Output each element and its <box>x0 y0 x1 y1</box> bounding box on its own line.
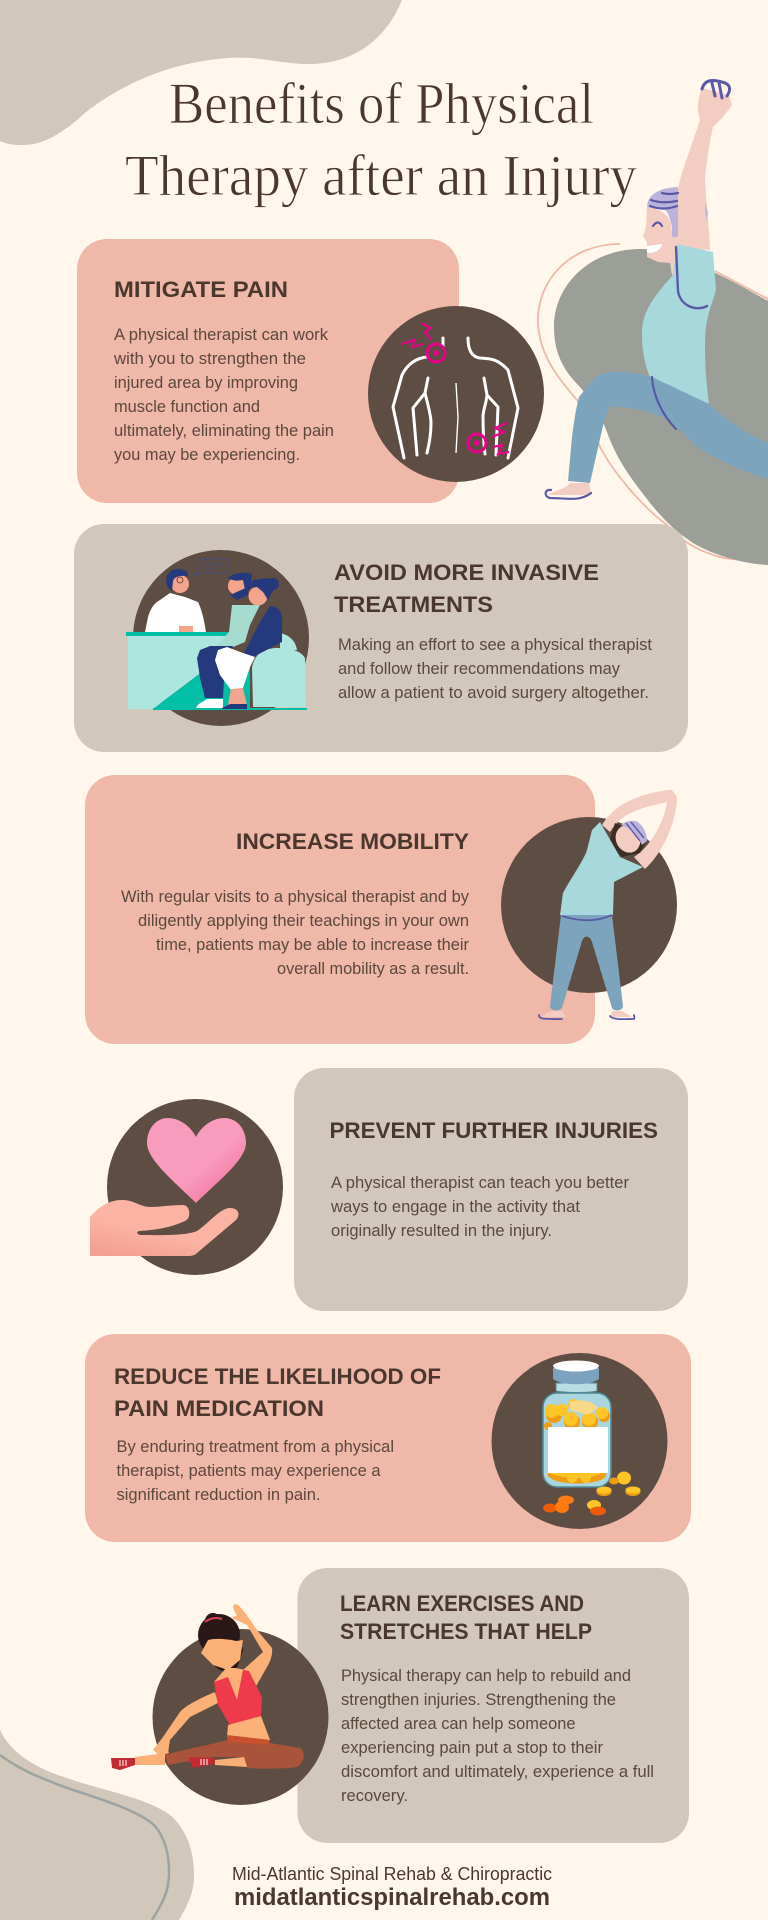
panel: avoid more invasive treatments <box>74 524 688 752</box>
icon: doctor consultation <box>126 550 309 726</box>
body text <box>116 1438 394 1504</box>
panel: mitigate pain <box>77 239 544 503</box>
hair <box>647 187 708 237</box>
body text: recovery. <box>341 1787 408 1805</box>
shirt <box>642 244 716 404</box>
body text: affected area can help someone <box>341 1715 576 1733</box>
panel: learn exercises and stretches <box>111 1568 689 1843</box>
heading: INCREASE MOBILITY <box>236 829 469 854</box>
panel: reduce the likelihood of pain medication <box>85 1334 691 1542</box>
heading: REDUCE THE LIKELIHOOD OF <box>114 1364 441 1389</box>
body text: originally resulted in the injury. <box>331 1222 552 1240</box>
icon: back with pain points <box>368 306 544 482</box>
body text: ultimately, eliminating the pain <box>114 422 334 440</box>
body text: injured area by improving <box>114 374 298 392</box>
panel: increase mobility <box>85 775 677 1044</box>
raised arm <box>677 88 732 250</box>
body text: strengthen injuries. Strengthening the <box>341 1691 616 1709</box>
fingers <box>702 80 730 98</box>
body text <box>121 888 470 978</box>
body text: overall mobility as a result. <box>277 960 469 978</box>
body text: allow a patient to avoid surgery altogether. <box>338 684 649 702</box>
body text: diligently applying their teachings in your own <box>138 912 469 930</box>
pink outline blob <box>538 244 768 561</box>
heading: AVOID MORE INVASIVE <box>334 560 599 585</box>
heading <box>340 1591 592 1644</box>
sleeve line <box>676 247 707 308</box>
body text <box>338 636 652 702</box>
heading <box>114 1364 441 1421</box>
decorative blob: top left <box>0 0 402 145</box>
heading: MITIGATE PAIN <box>114 277 288 302</box>
card background <box>85 1334 691 1542</box>
body text <box>330 1174 630 1240</box>
body text: ways to engage in the activity that <box>330 1198 580 1216</box>
body text <box>341 1667 654 1805</box>
title: Therapy after an Injury <box>125 143 637 208</box>
body text: muscle function and <box>114 398 260 416</box>
body text: A physical therapist can teach you better <box>331 1174 630 1192</box>
heading: TREATMENTS <box>334 592 493 617</box>
heading: STRETCHES THAT HELP <box>340 1619 592 1644</box>
jeans <box>568 372 768 483</box>
body text: With regular visits to a physical therapist and by <box>121 888 470 906</box>
body text: significant reduction in pain. <box>116 1486 320 1504</box>
body text <box>113 326 334 464</box>
title: Benefits of Physical <box>169 71 594 136</box>
heading <box>334 560 599 617</box>
grey blob <box>554 249 768 565</box>
icon: hand holding heart <box>90 1099 283 1275</box>
panel: prevent further injuries <box>90 1068 688 1311</box>
body text: with you to strengthen the <box>113 350 306 368</box>
body text: A physical therapist can work <box>114 326 329 344</box>
icon: pill bottle <box>492 1353 668 1529</box>
illustration: man with raised arm over grey blob <box>538 80 768 565</box>
heading: PAIN MEDICATION <box>114 1396 324 1421</box>
smile <box>647 244 662 253</box>
icon: person stretching <box>501 790 677 1019</box>
card background <box>298 1568 689 1843</box>
heading: PREVENT FURTHER INJURIES <box>330 1118 658 1143</box>
decorative blob: bottom left with line <box>0 1730 194 1920</box>
body text: Physical therapy can help to rebuild and <box>341 1667 631 1685</box>
foot outline <box>546 490 591 499</box>
card background <box>294 1068 688 1311</box>
body text: discomfort and ultimately, experience a full <box>341 1763 654 1781</box>
card background <box>85 775 595 1044</box>
body text: time, patients may be able to increase their <box>156 936 470 954</box>
icon: woman stretching <box>111 1604 328 1805</box>
body text: Making an effort to see a physical therapist <box>338 636 652 654</box>
card background <box>77 239 459 503</box>
footer: website: midatlanticspinalrehab.com <box>234 1884 550 1911</box>
heading: LEARN EXERCISES AND <box>340 1591 584 1616</box>
card background <box>74 524 688 752</box>
body text: therapist, patients may experience a <box>116 1462 381 1480</box>
body text: you may be experiencing. <box>114 446 300 464</box>
footer: organization name: Mid-Atlantic Spinal Rehab & Chiropractic <box>232 1864 552 1884</box>
hair stripes and eye <box>650 193 678 226</box>
face <box>643 207 678 275</box>
foot <box>548 483 591 495</box>
body text: and follow their recommendations may <box>338 660 621 678</box>
body text: experiencing pain put a stop to their <box>341 1739 604 1757</box>
jeans seam <box>652 377 676 429</box>
title <box>125 71 637 208</box>
body text: By enduring treatment from a physical <box>116 1438 394 1456</box>
